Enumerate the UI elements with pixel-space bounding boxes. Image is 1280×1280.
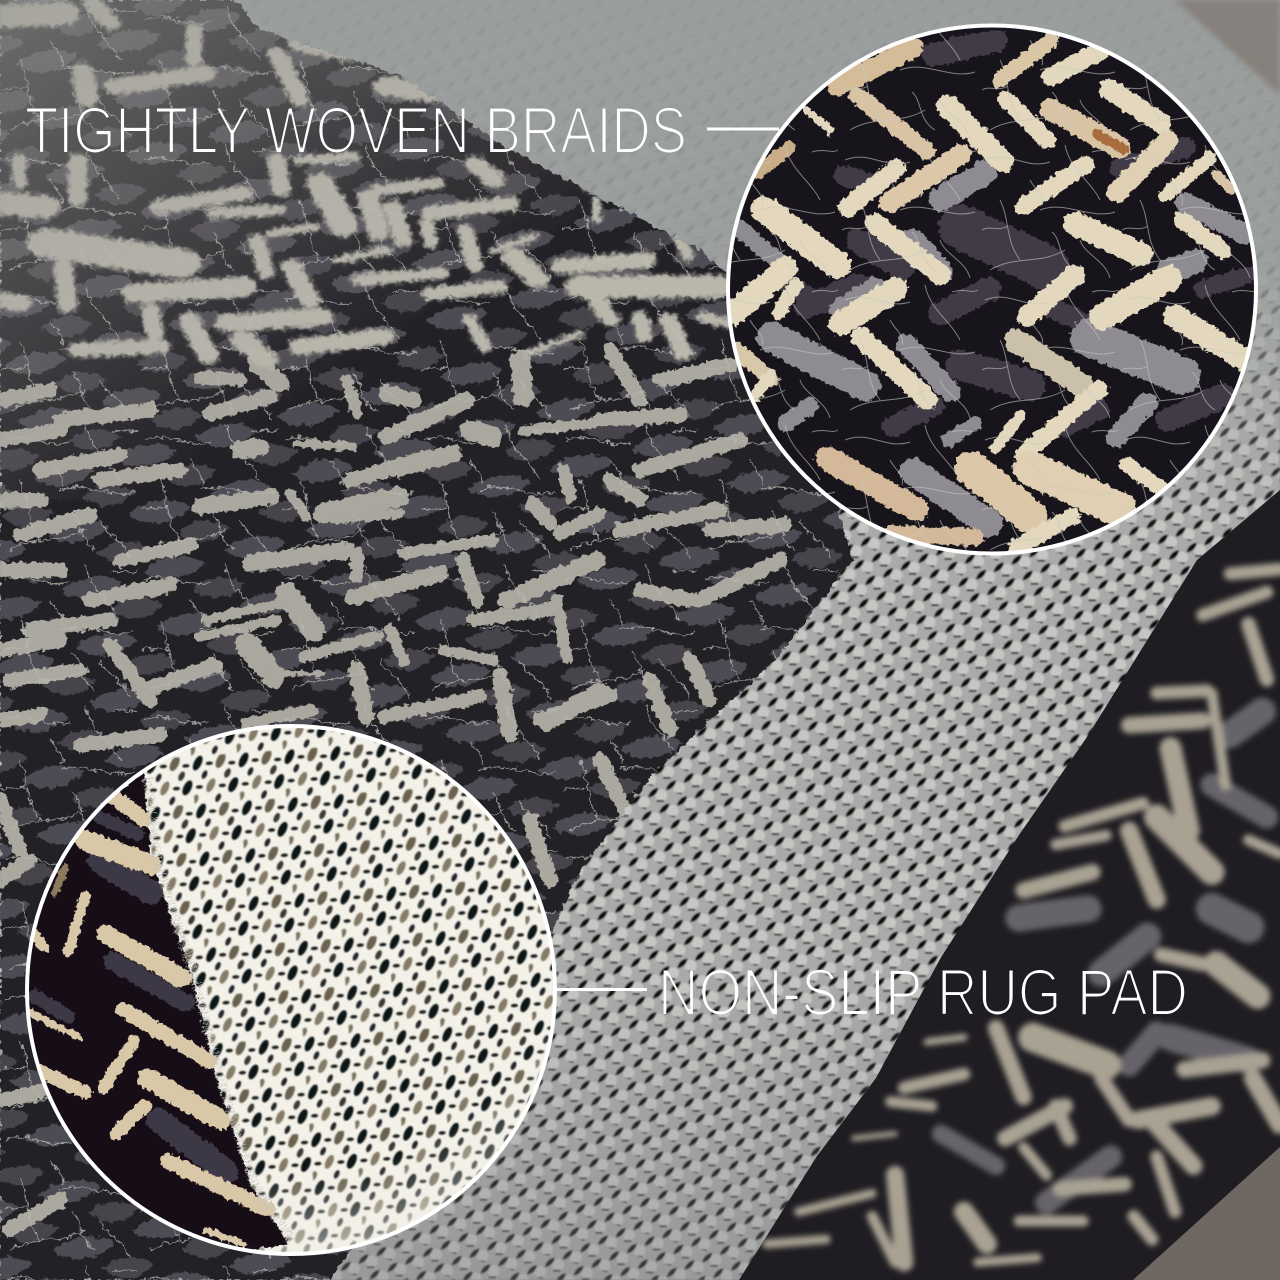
rug stitches lower right [767, 569, 1280, 1262]
stray fibres [720, 20, 1260, 560]
panel: woven rug top-left [0, 0, 900, 1280]
leader line: pad [556, 988, 647, 991]
label: tightly woven braids: TIGHTLY WOVEN BRAIDS [25, 93, 687, 167]
dark grey strands [786, 41, 1248, 427]
panel: blurred rug lower right [730, 480, 1280, 1280]
leader line: braids [707, 128, 779, 130]
callout circle: non-slip rug pad detail [20, 720, 560, 1260]
cream stitches [734, 41, 1248, 548]
label: non-slip rug pad: NON-SLIP RUG PAD [658, 955, 1188, 1029]
rug stitches top [0, 3, 737, 360]
fuzzy edge fibres [148, 779, 292, 1241]
rug stitches edges [0, 350, 785, 1240]
background: wood floor corners [1133, 0, 1280, 1280]
callout circle: tightly woven braids detail [720, 20, 1260, 560]
braid edge [20, 772, 289, 1258]
light grey strands [737, 172, 1244, 523]
rug stitches centre [200, 360, 600, 733]
